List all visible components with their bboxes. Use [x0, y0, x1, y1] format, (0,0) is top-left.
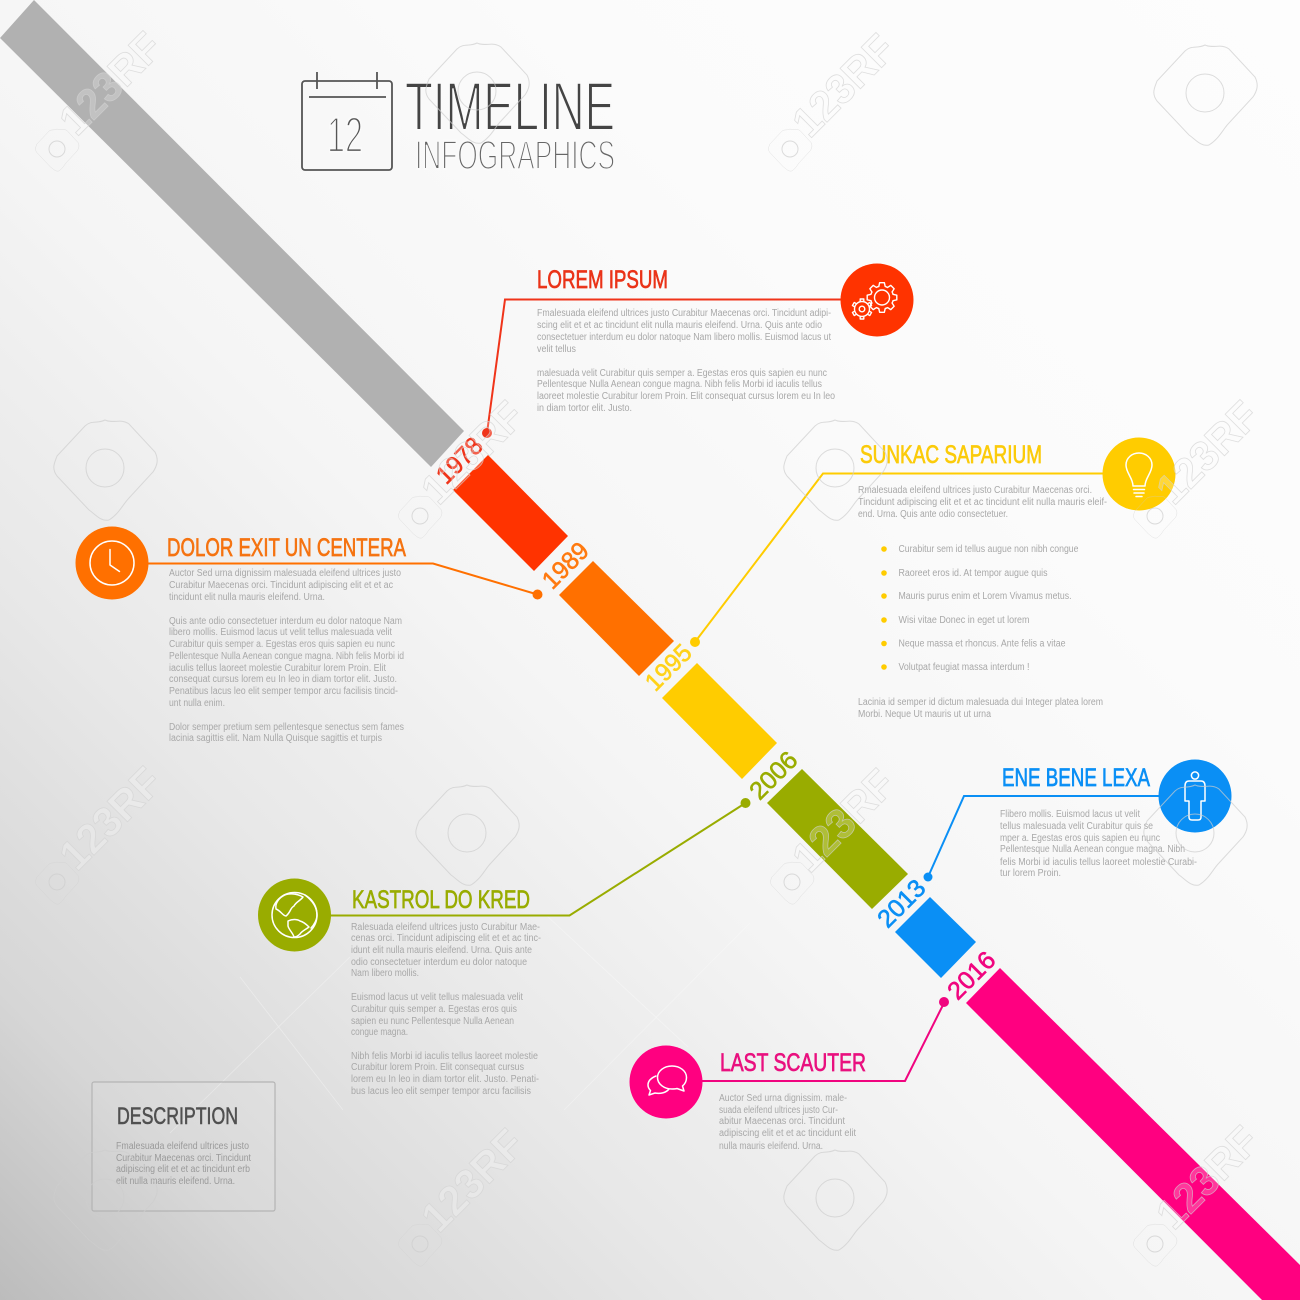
year labels [431, 432, 1001, 1005]
body text: Curabitur quis semper a. Egestas eros quis sapien eu nunc [169, 639, 395, 650]
body text: Pellentesque Nulla Aenean congue magna. Nibh [1000, 844, 1185, 855]
body text: felis Morbi id iaculis tellus laoreet molestie Curabi- [1000, 857, 1197, 868]
connector [487, 300, 860, 433]
body text: scing elit et et ac tincidunt elit nulla mauris eleifend. Urna. Quis ante odio [537, 320, 822, 331]
body text: consequat cursus lorem eu In leo in diam tortor elit. Justo. [169, 674, 397, 685]
body text: sapien eu nunc Pellentesque Nulla Aenean [351, 1016, 514, 1027]
body text: libero mollis. Euismod lacus ut velit tellus malesuada velit [169, 627, 392, 638]
description heading: DESCRIPTION [117, 1103, 238, 1130]
bullet list: Mauris purus enim et Lorem Vivamus metus. [898, 591, 1072, 602]
body text: mper a. Egestas eros quis sapien eu nunc [1000, 833, 1160, 844]
dot [532, 590, 542, 600]
body text: tur lorem Proin. [1000, 868, 1061, 879]
dot [924, 872, 932, 882]
band segment: grey lead-in [0, 0, 464, 467]
body text [169, 568, 404, 744]
panel: 1989 dolor exit un centera [76, 526, 542, 744]
year 1989: 1989 [537, 537, 595, 595]
body text: bus lacus leo elit semper tempor arcu facilisis [351, 1086, 531, 1097]
body text: abitur Maecenas orci. Tincidunt [719, 1116, 845, 1127]
description text: adipiscing elit et et ac tincidunt erb [116, 1164, 250, 1175]
heading: KASTROL DO KRED [352, 886, 530, 914]
body text: tellus malesuada velit Curabitur quis se [1000, 821, 1153, 832]
year 2006: 2006 [744, 746, 803, 805]
description text: elit nulla mauris eleifend. Urna. [116, 1176, 235, 1187]
bullet list: Raoreet eros id. At tempor augue quis [898, 568, 1048, 579]
band segment: 2013 blue [895, 897, 976, 978]
body text: Dolor semper pretium sem pellentesque senectus sem fames [169, 722, 404, 733]
body text: Quis ante odio consectetuer interdum eu dolor natoque Nam [169, 616, 402, 627]
intro text: Tincidunt adipiscing elit et et ac tincidunt elit nulla mauris eleif- [858, 497, 1107, 508]
icon: speech bubbles [630, 1046, 702, 1118]
icon: calendar [302, 72, 392, 170]
body text: tincidunt elit nulla mauris eleifend. Urna. [169, 592, 325, 603]
panel: description [92, 1082, 275, 1211]
icon: person [1158, 760, 1232, 832]
icon: globe [258, 878, 331, 952]
band segment: 1995 yellow [662, 663, 777, 779]
watermark overlay: 123RF [783, 760, 904, 881]
body text: odio consectetuer interdum eu dolor natoque [351, 957, 527, 968]
intro text [858, 485, 1107, 520]
body text [1000, 809, 1197, 879]
heading: DOLOR EXIT UN CENTERA [167, 534, 406, 562]
watermark overlay: 123RF [1147, 1117, 1268, 1238]
body text [351, 922, 541, 1097]
bullet list [881, 544, 1079, 673]
body text: laoreet molestie Curabitur lorem Proin. Elit consequat cursus lorem eu In leo [537, 391, 835, 402]
watermark overlay: 123RF [412, 1120, 533, 1241]
bullet list: Volutpat feugiat massa interdum ! [898, 662, 1030, 673]
band segment: 2006 green [767, 769, 908, 909]
connector [695, 1003, 944, 1081]
dot [482, 428, 492, 438]
watermark overlay: 123RF [50, 758, 171, 879]
body text: velit tellus [537, 344, 576, 355]
dot [740, 798, 750, 808]
year 2016: 2016 [942, 946, 1001, 1005]
panel: 1995 sunkac saparium [690, 438, 1176, 720]
panel: 2013 ene bene lexa [924, 760, 1232, 882]
body text: Pellentesque Nulla Aenean congue magna. Nibh felis Morbi id iaculis tellus [537, 379, 822, 390]
bullet list: Curabitur sem id tellus augue non nibh congue [898, 544, 1079, 555]
panel: 1978 lorem ipsum [482, 264, 914, 438]
year 1995: 1995 [640, 639, 698, 697]
body text: Ralesuada eleifend ultrices justo Curabitur Mae- [351, 922, 540, 933]
body text: nulla mauris eleifend. Urna. [719, 1141, 823, 1152]
closing text: Morbi. Neque Ut mauris ut ut urna [858, 709, 991, 720]
band segment: 2016 magenta [966, 968, 1300, 1300]
body text: Nibh felis Morbi id iaculis tellus laoreet molestie [351, 1051, 538, 1062]
panel: 2016 last scauter [630, 997, 949, 1152]
description text [116, 1141, 251, 1187]
watermark overlay: 123RF [783, 25, 904, 146]
closing text: Lacinia id semper id dictum malesuada dui Integer platea lorem [858, 697, 1103, 708]
body text: lacinia sagittis elit. Nam Nulla Quisque sagittis et turpis [169, 733, 382, 744]
band segment: 1978 red [453, 455, 568, 571]
body text [719, 1093, 856, 1152]
title: timeline: TIMELINE [405, 68, 615, 145]
body text: cenas orci. Tincidunt adipiscing elit et et ac tinc- [351, 933, 541, 944]
icon: light bulb [1102, 438, 1176, 510]
body text: Pellentesque Nulla Aenean congue magna. Nibh felis Morbi id [169, 651, 404, 662]
body text: lorem eu In leo in diam tortor elit. Justo. Penati- [351, 1074, 539, 1085]
dot [939, 997, 949, 1007]
intro text: end. Urna. Quis ante odio consectetuer. [858, 509, 1008, 520]
body text: Curabitur lorem Proin. Elit consequat cursus [351, 1062, 524, 1073]
bullet list: Wisi vitae Donec in eget ut lorem [898, 615, 1030, 626]
body text: malesuada velit Curabitur quis semper a. Egestas eros quis sapien eu nunc [537, 368, 827, 379]
body text: consectetuer interdum eu dolor natoque Nam libero mollis. Euismod lacus ut [537, 332, 831, 343]
body text [537, 308, 835, 414]
body text: congue magna. [351, 1027, 408, 1038]
body text: in diam tortor elit. Justo. [537, 403, 632, 414]
subtitle: infographics: INFOGRAPHICS [415, 132, 615, 178]
heading: LOREM IPSUM [537, 266, 668, 294]
icon: gears [840, 264, 914, 336]
dot [690, 637, 700, 647]
icon: calendar: 12 [327, 107, 363, 163]
body text: suada eleifend ultrices justo Cur- [719, 1105, 838, 1116]
body text: Curabitur Maecenas orci. Tincidunt adipiscing elit et et ac [169, 580, 393, 591]
body text: adipiscing elit et et ac tincidunt elit [719, 1128, 856, 1139]
heading: LAST SCAUTER [720, 1049, 866, 1077]
body text: iaculis tellus laoreet molestie Curabitur lorem Proin. Elit [169, 663, 386, 674]
body text: Nam libero mollis. [351, 968, 419, 979]
year 2013: 2013 [872, 874, 931, 933]
body text: Curabitur quis semper a. Egestas eros quis [351, 1004, 517, 1015]
heading: SUNKAC SAPARIUM [860, 441, 1042, 469]
icon: clock [76, 526, 148, 600]
connector [928, 796, 1170, 877]
connector [695, 474, 1110, 642]
watermark overlay: 123RF [412, 392, 533, 513]
panel: 2006 kastrol do kred [258, 798, 750, 1097]
body text: Euismod lacus ut velit tellus malesuada velit [351, 992, 523, 1003]
heading: ENE BENE LEXA [1002, 764, 1150, 792]
body text: Fmalesuada eleifend ultrices justo Curabitur Maecenas orci. Tincidunt adipi- [537, 308, 831, 319]
description text: Fmalesuada eleifend ultrices justo [116, 1141, 249, 1152]
body text: idunt elit nulla mauris eleifend. Urna. Quis ante [351, 945, 532, 956]
body text: Flibero mollis. Euismod lacus ut velit [1000, 809, 1140, 820]
description box [92, 1082, 275, 1211]
title block [302, 68, 615, 178]
body text: Auctor Sed urna dignissim. male- [719, 1093, 847, 1104]
intro text: Rmalesuada eleifend ultrices justo Curabitur Maecenas orci. [858, 485, 1092, 496]
body text: Auctor Sed urna dignissim malesuada eleifend ultrices justo [169, 568, 401, 579]
watermark overlay: 123RF [1147, 392, 1268, 513]
body text: unt nulla enim. [169, 698, 225, 709]
connector [325, 803, 746, 916]
band segment: 1989 orange [559, 561, 674, 676]
bullet list: Neque massa et rhoncus. Ante felis a vitae [898, 638, 1066, 650]
year 1978: 1978 [431, 432, 489, 490]
closing text [858, 697, 1103, 720]
connector [148, 564, 538, 594]
watermark overlay: 123RF [50, 23, 171, 144]
body text: Penatibus lacus leo elit semper tempor arcu facilisis tincid- [169, 686, 398, 697]
description text: Curabitur Maecenas orci. Tincidunt [116, 1153, 251, 1164]
